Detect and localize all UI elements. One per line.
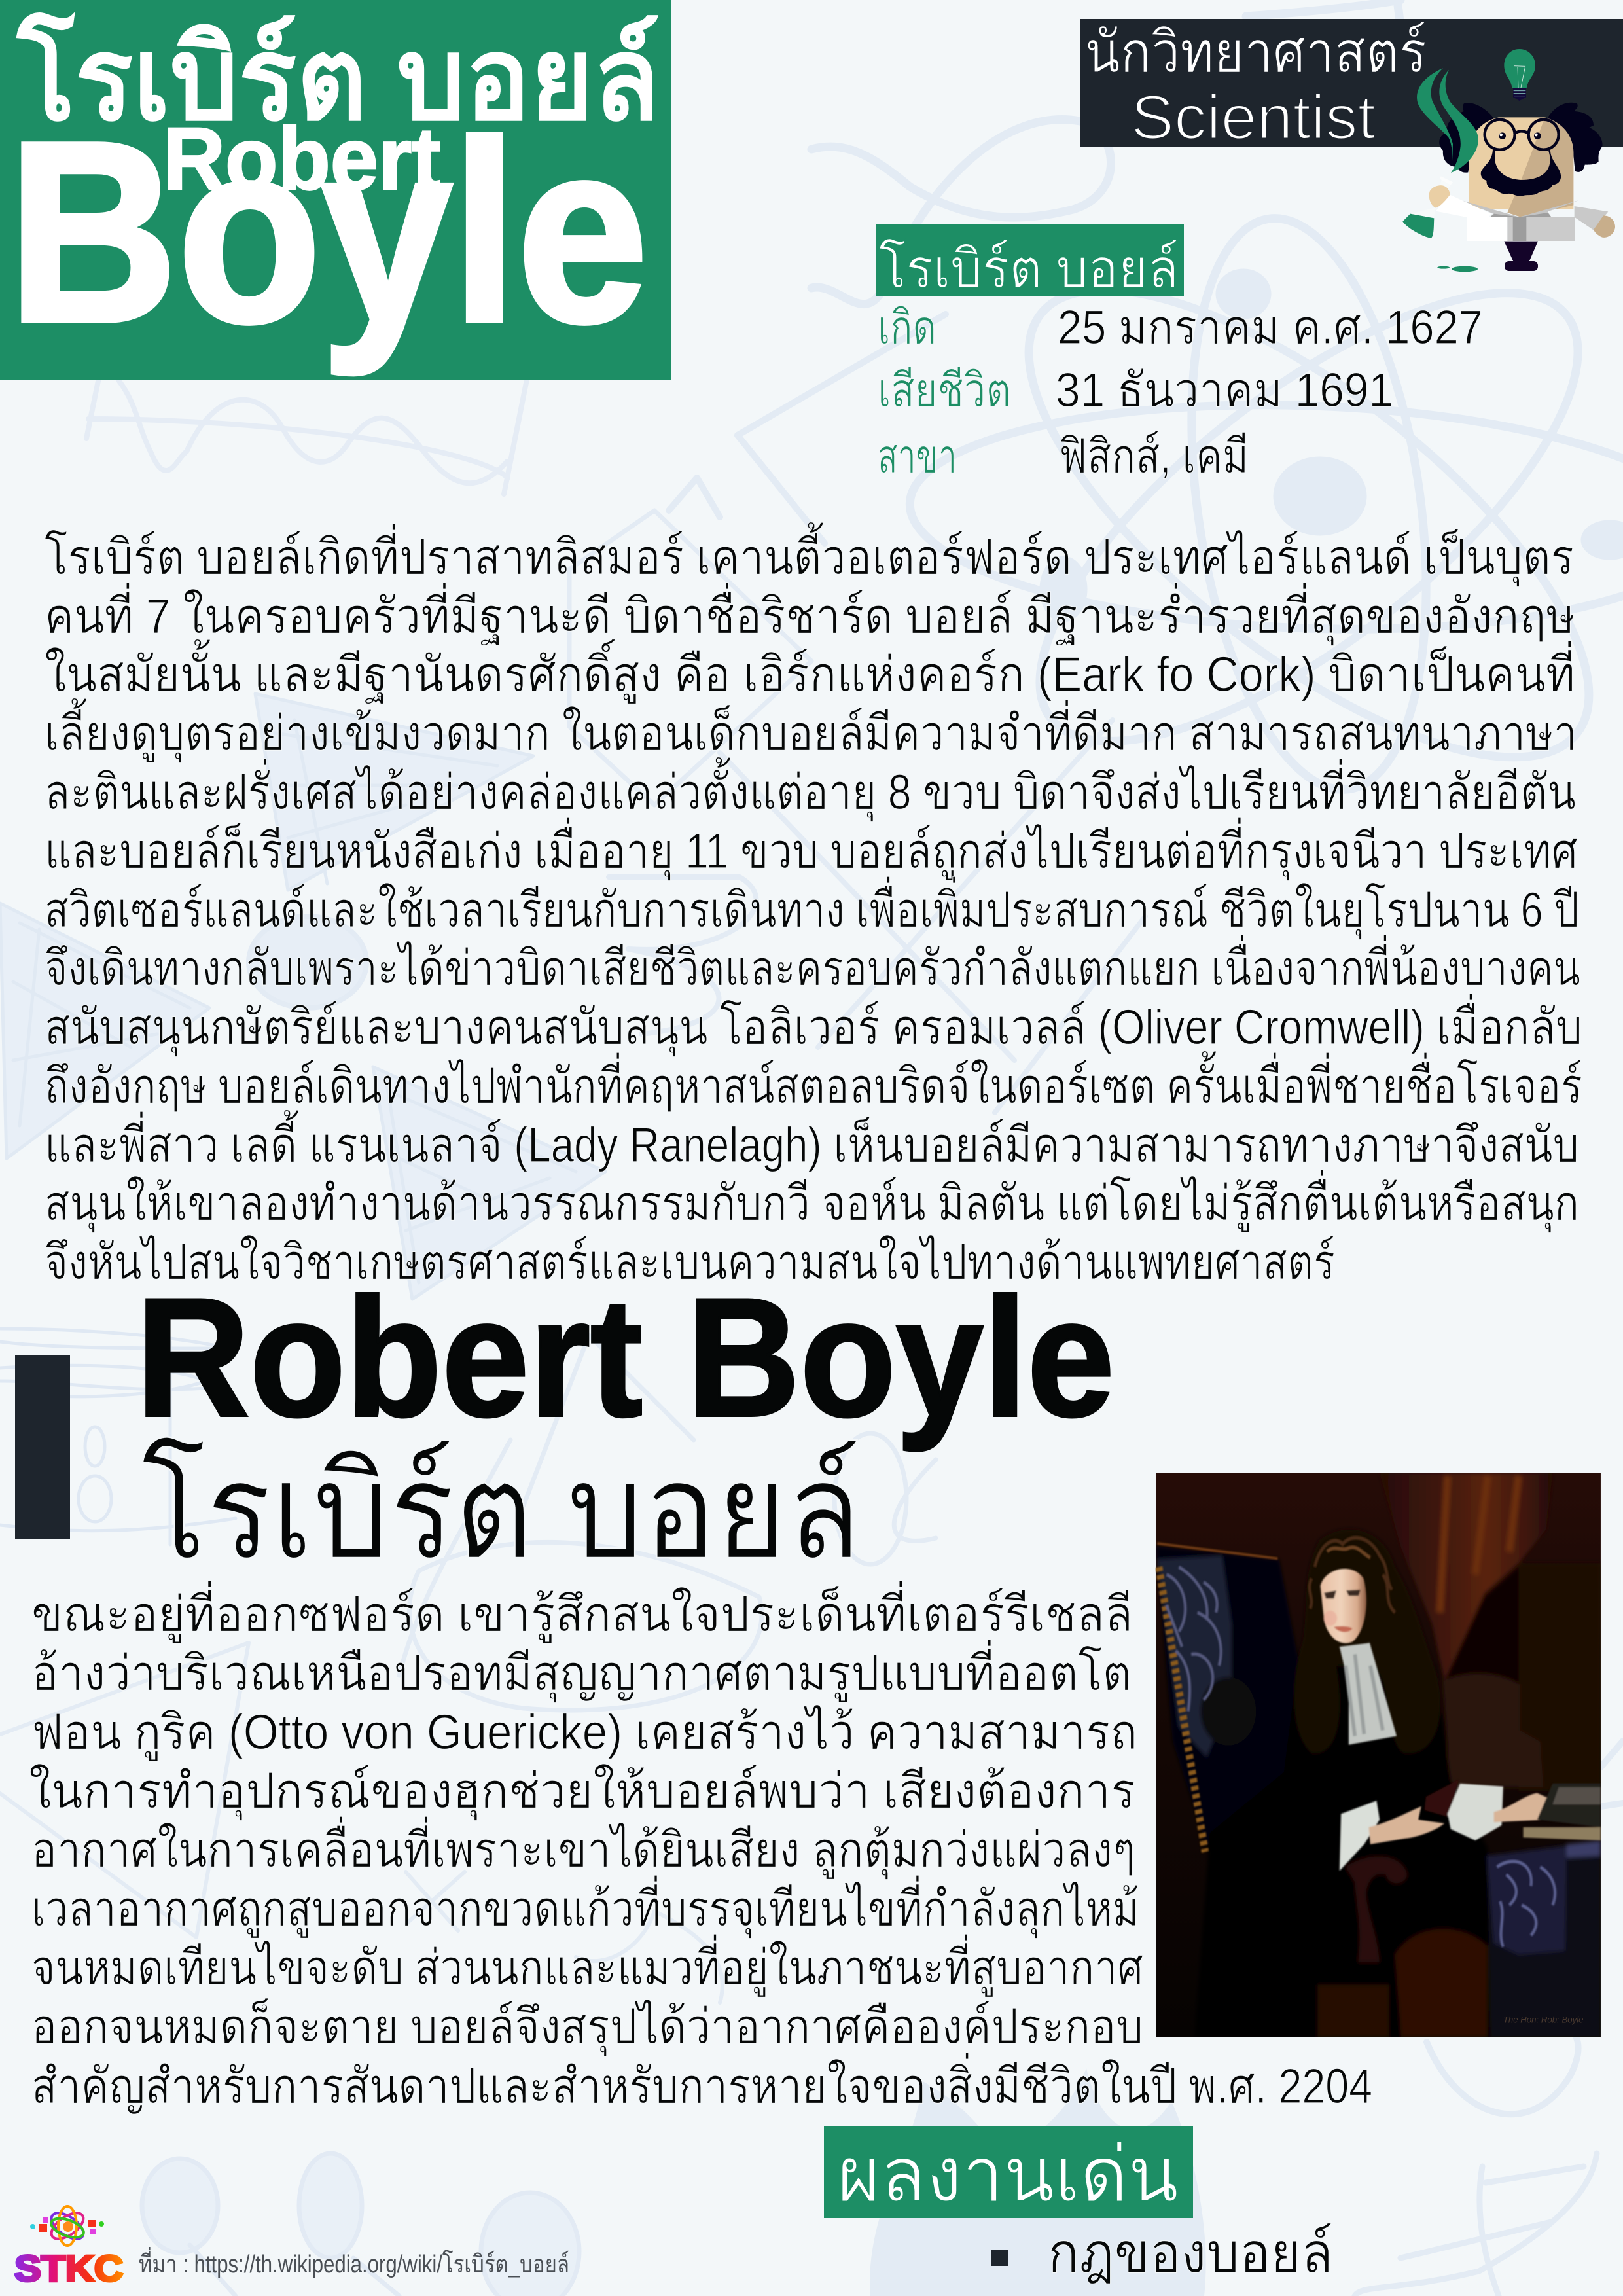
- red knee: [1395, 1929, 1488, 2037]
- panel: biography facts: [876, 224, 1483, 483]
- text block: early life: จึงหันไปสนใจวิชาเกษตรศาสตร์และเบนความสนใจไปทางด้านแพทยศาสตร์: [45, 1234, 1335, 1289]
- heading: Thai name: โรเบิร์ต บอยล์: [141, 1437, 861, 1587]
- head: [1469, 117, 1573, 209]
- signature: The Hon: Rob: Boyle: [1503, 2015, 1584, 2025]
- doodle: pencil scribble one: [255, 694, 533, 890]
- doodle: DNA helix bottom right: [1355, 2153, 1597, 2296]
- doodle: triangle outline: [669, 314, 946, 543]
- title: Robert: Robert: [163, 109, 440, 208]
- robe: [1194, 1651, 1488, 2037]
- banner English label: Scientist: [1131, 82, 1376, 152]
- seat fringe: [1318, 1985, 1389, 2037]
- cuffs: [1425, 1780, 1458, 1818]
- face: [1320, 1569, 1366, 1643]
- heading: Robert Boyle: [136, 1263, 1115, 1587]
- doodle: pencil scribble three: [373, 1067, 605, 1299]
- text block: Oxford experiments: สำคัญสำหรับการสันดาปและสำหรับการหายใจของสิ่งมีชีวิตในปี พ.ศ. 2204: [31, 2053, 1372, 2114]
- table cloth: [1487, 1840, 1601, 2037]
- glasses: [1485, 120, 1559, 150]
- text block: Oxford experiments: ในการทำอุปกรณ์ของฮุกช่วยให้บอยล์พบว่า เสียงต้องการ: [29, 1763, 1135, 1821]
- source credit: ที่มา : https://th.wikipedia.org/wiki/โรเบิร์ต_บอยล์: [139, 2247, 569, 2278]
- doodle: flame shape bottom centre: [870, 2068, 1206, 2296]
- hair: [1439, 103, 1603, 173]
- text block: Oxford experiments: ฟอน กูริค (Otto von Guericke) เคยสร้างไว้ ความสามารถ: [31, 1704, 1137, 1762]
- banner Thai label: นักวิทยาศาสตร์: [1085, 20, 1427, 84]
- text block: early life: [45, 522, 1582, 1289]
- fact: field: สาขา: [878, 431, 957, 483]
- shadow wedge: [1452, 1570, 1519, 1679]
- book: [1537, 1784, 1601, 1827]
- text block: Oxford experiments: อ้างว่าบริเวณเหนือปรอทมีสุญญากาศตามรูปแบบที่ออตโต: [31, 1640, 1132, 1703]
- fact: died: [878, 364, 1393, 417]
- doodle: triangles under heading: [0, 1643, 722, 2003]
- logo atom: [30, 2206, 104, 2246]
- doodle: nucleus and loops middle: [249, 511, 1145, 1113]
- moustache: [1481, 149, 1561, 196]
- fact: born: 25 มกราคม ค.ศ. 1627: [1058, 301, 1483, 354]
- title: Boyle: Boyle: [8, 89, 648, 377]
- portrait of Robert Boyle: [1156, 1473, 1601, 2037]
- wall right: [1518, 1563, 1601, 1791]
- chair edge: [1157, 1543, 1277, 1558]
- collar: [1463, 200, 1578, 217]
- doodle: diagonal lines through heading: [399, 1335, 936, 1710]
- text block: Oxford experiments: [29, 1581, 1372, 2114]
- doodle: teardrop scribbles: [142, 2153, 579, 2296]
- fact: died: 31 ธันวาคม 1691: [1056, 364, 1393, 417]
- hand holding flask: [1429, 185, 1450, 207]
- fact: field: ฟิสิกส์, เคมี: [1059, 430, 1249, 483]
- icon: light bulb: [1504, 49, 1535, 101]
- eyes: [1499, 132, 1541, 139]
- shoes: [1505, 261, 1538, 271]
- panel: scientist banner: [1080, 19, 1623, 152]
- doodle: right side arcs near portrait: [1427, 1741, 1623, 2114]
- chair back: [1156, 1546, 1299, 1856]
- name tag: โรเบิร์ต บอยล์: [879, 238, 1179, 299]
- fact: field: [878, 430, 1249, 483]
- doodle: scribble left of heading: [0, 1329, 236, 1545]
- lab coat: [1436, 194, 1608, 241]
- panel: notable works heading: ผลงานเด่น: [837, 2132, 1179, 2218]
- doodle: pencil scribble two: [0, 903, 209, 1158]
- text block: Oxford experiments: จนหมดเทียนไขจะดับ ส่วนนกและแมวที่อยู่ในภาชนะที่สูบอากาศ: [31, 1934, 1143, 1998]
- flask with liquid: [1402, 176, 1453, 238]
- text block: Oxford experiments: เวลาอากาศถูกสูบออกจากขวดแก้วที่บรรจุเทียนไขที่กำลังลุกไหม้: [31, 1875, 1139, 1939]
- brocade leaves: [1166, 1567, 1221, 1712]
- logo: STKC: [14, 2206, 123, 2289]
- text block: Oxford experiments: ออกจนหมดก็จะตาย บอยล์จึงสรุปได้ว่าอากาศคือองค์ประกอบ: [31, 1998, 1143, 2056]
- doodle: small atom top centre: [812, 0, 1400, 304]
- cravat: [1340, 1643, 1397, 1745]
- head shaded side: [1507, 117, 1573, 217]
- hair mass: [1294, 1530, 1440, 1753]
- fact: born: เกิด: [878, 302, 936, 354]
- heading: Robert Boyle: Robert Boyle: [136, 1263, 1115, 1452]
- legs and shoes: [1504, 242, 1538, 261]
- fact: died: เสียชีวิต: [878, 365, 1011, 417]
- hand right: [1594, 215, 1615, 238]
- cloth highlights: [1497, 1861, 1555, 1947]
- chair arm: [1346, 1856, 1408, 1962]
- logo wordmark: STKC: [14, 2248, 123, 2289]
- spills: [1437, 266, 1478, 272]
- fact: born: [878, 301, 1483, 354]
- doodle: wave graph under header: [86, 380, 527, 494]
- hair curls: [1310, 1538, 1395, 1613]
- column: [1443, 1674, 1543, 1787]
- vapour: [1417, 68, 1478, 173]
- title: Thai name: โรเบิร์ต บอยล์: [16, 11, 660, 144]
- icon: scientist character: [1402, 49, 1615, 272]
- hands: [1369, 1806, 1444, 1844]
- text block: Oxford experiments: ขณะอยู่ที่ออกซฟอร์ด เขารู้สึกสนใจประเด็นที่เตอร์รีเชลลี: [31, 1581, 1133, 1644]
- panel: green title block: [0, 0, 671, 380]
- list item: Boyle's law: กฎของบอยล์: [1048, 2222, 1333, 2285]
- doodle: large atom top right: [906, 204, 1623, 836]
- drape: [1380, 1473, 1552, 1681]
- section accent bar: [15, 1355, 70, 1539]
- text block: Oxford experiments: อากาศในการเคลื่อนที่เพราะเขาได้ยินเสียง ลูกตุ้มกว่งแผ่วลงๆ: [31, 1816, 1135, 1880]
